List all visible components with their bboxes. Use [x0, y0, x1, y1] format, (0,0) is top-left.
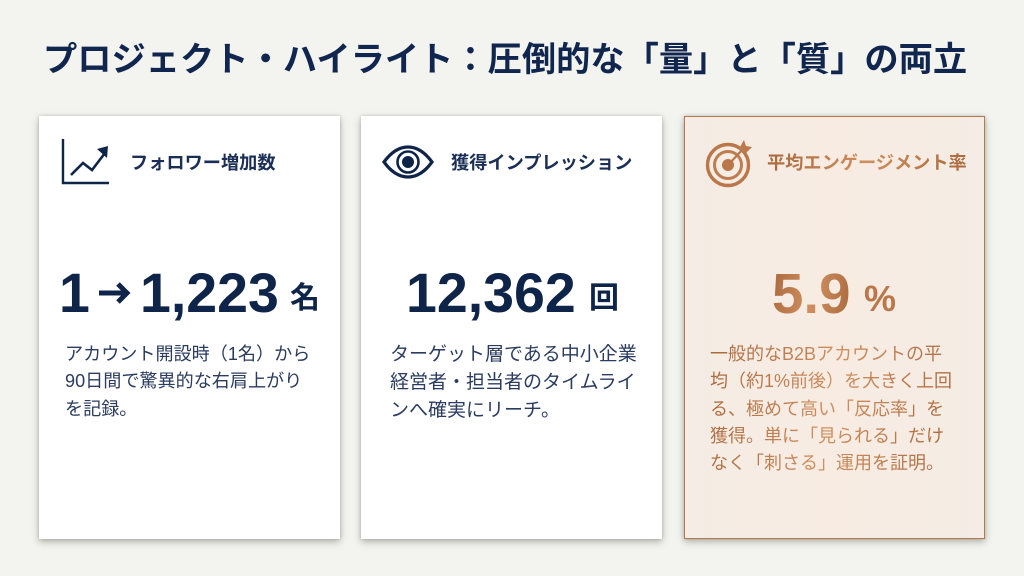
- stat: 12,362: [406, 262, 619, 324]
- heading: engagement rate: 平均エンゲージメント率: [767, 153, 967, 173]
- description: 90日間で驚異的な右肩上がり: [65, 371, 302, 391]
- description: を記録。: [65, 399, 137, 419]
- description: 一般的なB2Bアカウントの平: [710, 344, 942, 364]
- icon: eye: [382, 145, 434, 179]
- stat: 1 to 1,223: [59, 262, 320, 324]
- icon: line chart: [62, 139, 109, 184]
- description: る、極めて高い「反応率」を: [710, 399, 944, 419]
- panel: impressions: [361, 116, 662, 539]
- description: ターゲット層である中小企業: [390, 344, 637, 365]
- unit: 回: [589, 282, 619, 315]
- start value: 1: [59, 262, 90, 324]
- heading: follower growth: フォロワー増加数: [130, 153, 276, 173]
- description: 経営者・担当者のタイムライ: [390, 372, 636, 393]
- description: なく「刺さる」運用を証明。: [710, 453, 944, 473]
- title: プロジェクト・ハイライト：圧倒的な「量」と「質」の両立: [43, 41, 967, 79]
- panel: engagement rate: [684, 116, 985, 539]
- arrow: [99, 282, 130, 304]
- panel: follower growth: [39, 116, 340, 539]
- description: 均（約1%前後）を大きく上回: [710, 371, 952, 391]
- value: 12,362: [406, 262, 576, 324]
- icon: target: [706, 140, 752, 188]
- description: [390, 344, 637, 421]
- value: 5.9: [772, 262, 851, 325]
- description: [710, 341, 952, 477]
- unit: %: [864, 278, 896, 319]
- description: 獲得。単に「見られる」だけ: [710, 426, 944, 446]
- unit: 名: [290, 282, 320, 315]
- end value: 1,223: [140, 262, 279, 324]
- stat: 5.9%: [772, 262, 896, 325]
- description: [65, 344, 310, 419]
- description: ンへ確実にリーチ。: [390, 400, 560, 421]
- heading: impressions: 獲得インプレッション: [451, 153, 632, 173]
- description: アカウント開設時（1名）から: [65, 344, 310, 364]
